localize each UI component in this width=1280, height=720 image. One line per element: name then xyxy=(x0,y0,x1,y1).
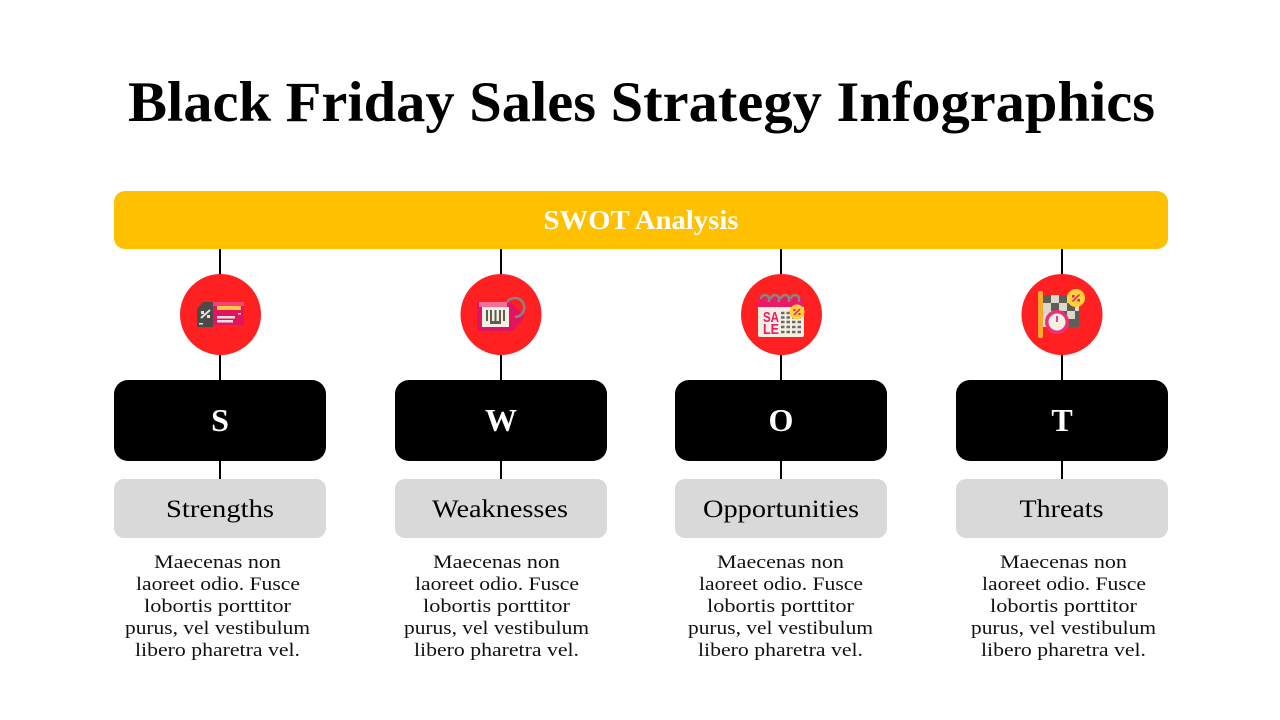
label: Weaknesses xyxy=(395,479,607,538)
text: weaknesses description: libero pharetra vel. xyxy=(414,641,579,661)
text: threats description xyxy=(971,553,1157,661)
label: Threats xyxy=(956,479,1168,538)
text: weaknesses description: lobortis porttitor xyxy=(423,597,570,617)
text: strengths description: lobortis porttitor xyxy=(144,597,291,617)
letter box: T: T xyxy=(1051,402,1073,438)
text: weaknesses description xyxy=(404,553,590,661)
text: weaknesses description: laoreet odio. Fusce xyxy=(415,575,579,595)
text: opportunities description: Maecenas non xyxy=(717,553,844,573)
title: Black Friday Sales Strategy Infographics xyxy=(128,71,1155,134)
banner: SWOT Analysis xyxy=(114,191,1168,249)
text: strengths description: libero pharetra vel. xyxy=(135,641,300,661)
text: strengths description xyxy=(125,553,311,661)
icon: discount coupon xyxy=(180,274,261,355)
icon: sale calendar: SA xyxy=(763,309,779,326)
text: opportunities description: lobortis porttitor xyxy=(707,597,854,617)
text: threats description: lobortis porttitor xyxy=(990,597,1137,617)
text: opportunities description xyxy=(688,553,874,661)
text: threats description: libero pharetra vel. xyxy=(981,641,1146,661)
label: Strengths xyxy=(114,479,326,538)
letter box: S: S xyxy=(211,402,229,438)
letter box: S xyxy=(114,380,326,461)
text: opportunities description: libero pharetra vel. xyxy=(698,641,863,661)
letter box: O: O xyxy=(769,402,793,438)
column: opportunities xyxy=(675,249,887,661)
text: threats description: laoreet odio. Fusce xyxy=(982,575,1146,595)
text: strengths description: laoreet odio. Fusce xyxy=(136,575,300,595)
text: strengths description: Maecenas non xyxy=(154,553,281,573)
column: strengths xyxy=(114,249,326,661)
icon: sale calendar: LE xyxy=(763,321,779,338)
letter box: T xyxy=(956,380,1168,461)
text: strengths description: purus, vel vestibulum xyxy=(125,619,311,639)
text: opportunities description: laoreet odio. Fusce xyxy=(699,575,863,595)
icon: sale calendar xyxy=(741,274,822,355)
column: threats xyxy=(956,249,1168,661)
icon: checkered flag and stopwatch xyxy=(1022,274,1102,355)
label: Opportunities xyxy=(675,479,887,538)
label: Weaknesses: Weaknesses xyxy=(432,496,568,523)
letter box: W: W xyxy=(485,402,517,438)
text: weaknesses description: Maecenas non xyxy=(433,553,560,573)
text: threats description: Maecenas non xyxy=(1000,553,1127,573)
banner: SWOT Analysis: SWOT Analysis xyxy=(544,205,738,235)
label: Opportunities: Opportunities xyxy=(703,496,859,523)
text: weaknesses description: purus, vel vestibulum xyxy=(404,619,590,639)
column: weaknesses xyxy=(395,249,607,661)
icon: barcode tag xyxy=(460,274,542,355)
label: Strengths: Strengths xyxy=(166,496,274,523)
letter box: W xyxy=(395,380,607,461)
label: Threats: Threats xyxy=(1020,496,1104,523)
text: threats description: purus, vel vestibulum xyxy=(971,619,1157,639)
letter box: O xyxy=(675,380,887,461)
text: opportunities description: purus, vel vestibulum xyxy=(688,619,874,639)
